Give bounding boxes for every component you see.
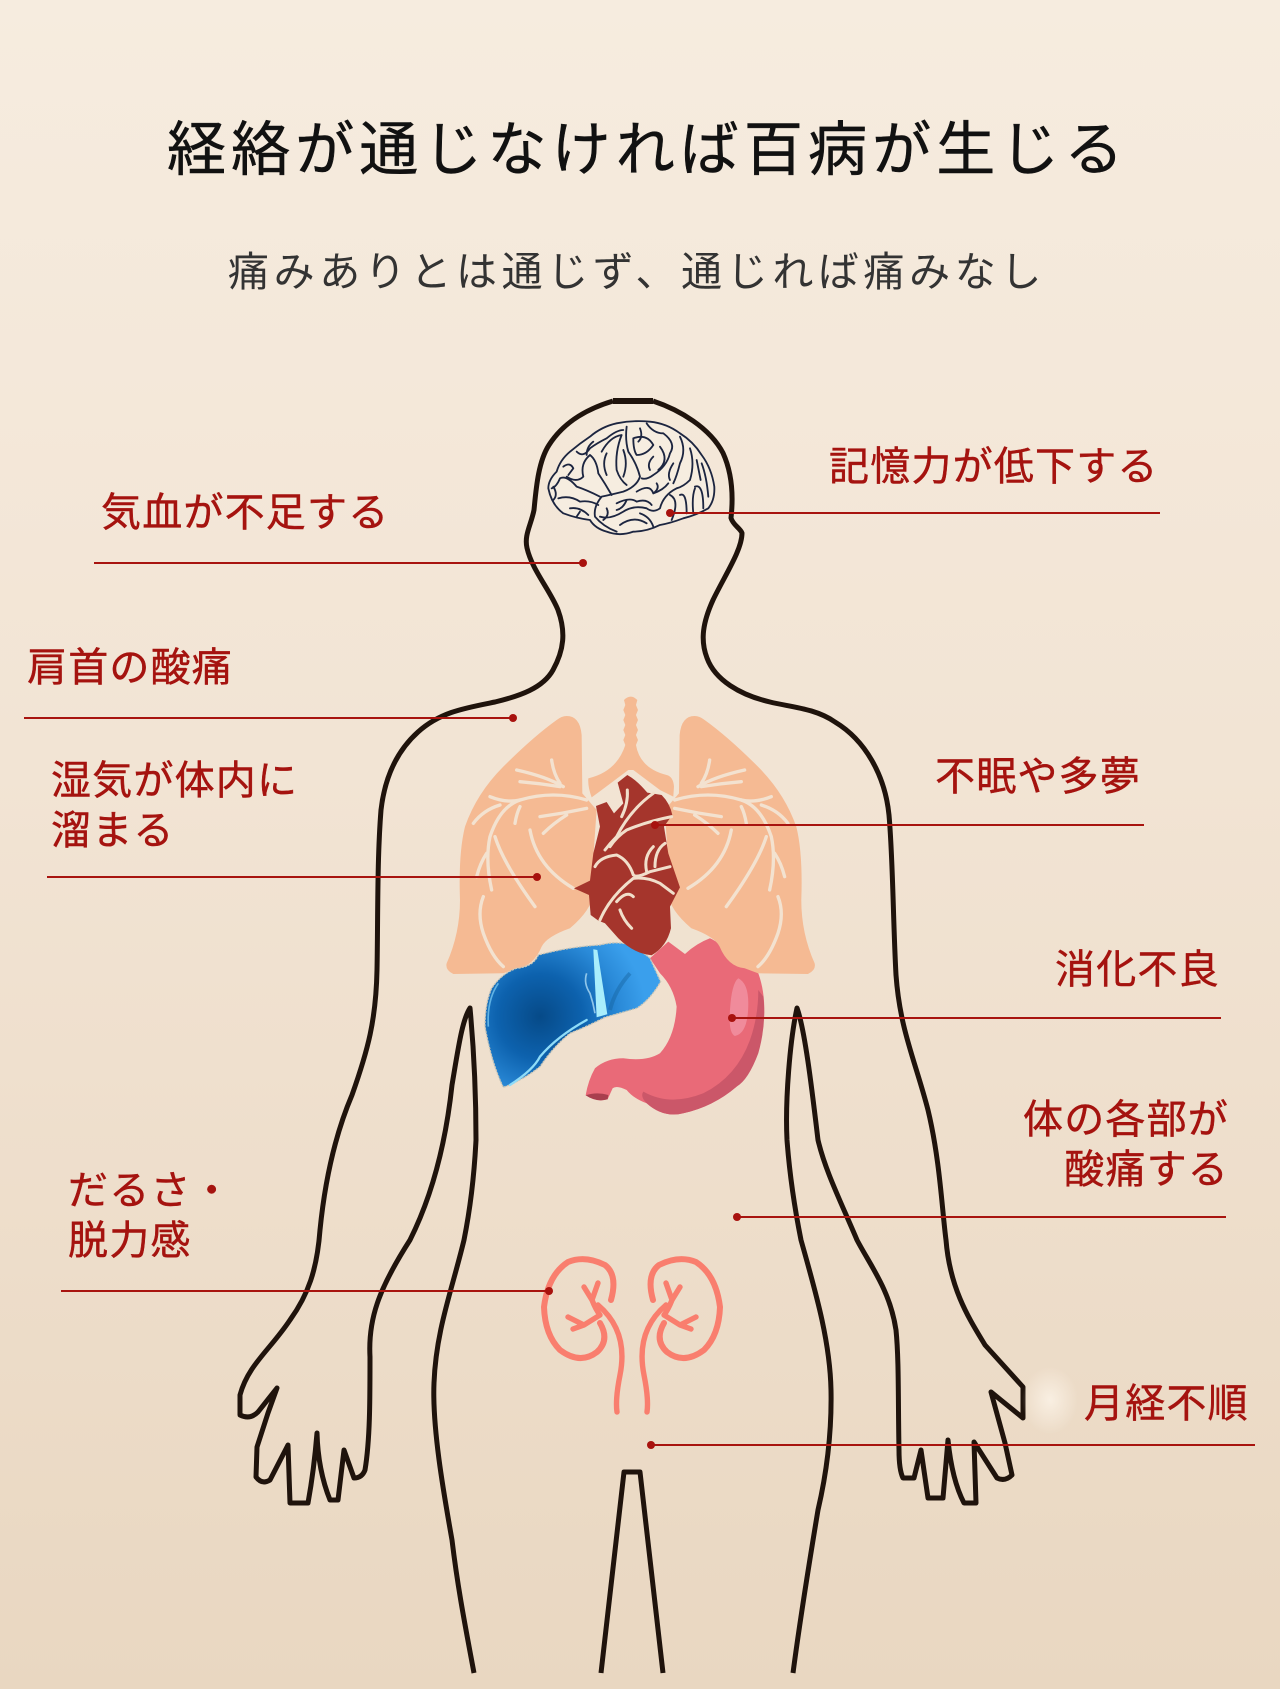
callout: 体の各部が酸痛する: 酸痛する [1064, 1148, 1229, 1192]
callout: だるさ・脱力感: 脱力感 [68, 1219, 192, 1263]
callout: 月経不順 [647, 1382, 1255, 1449]
callout: 湿気が体内に溜まる [47, 759, 541, 881]
icon: kidneys [544, 1259, 720, 1412]
callout: 湿気が体内に溜まる: 湿気が体内に [51, 759, 298, 803]
icon: brain [548, 421, 714, 534]
callout: 月経不順: 月経不順 [1084, 1382, 1249, 1426]
icon: lungs and trachea [446, 697, 815, 974]
subtitle: 痛みありとは通じず、通じれば痛みなし [228, 249, 1046, 295]
callout: 消化不良: 消化不良 [1055, 948, 1220, 992]
callout: だるさ・脱力感: だるさ・ [68, 1169, 233, 1213]
human body outline [240, 401, 1023, 1673]
callout: 気血が不足する [94, 491, 587, 567]
pale glow behind label [1022, 1366, 1078, 1434]
icon: heart [574, 775, 680, 955]
callout: 湿気が体内に溜まる: 溜まる [51, 809, 175, 853]
callout: 肩首の酸痛 [24, 646, 517, 722]
lung pair [446, 716, 597, 974]
callout: 記憶力が低下する: 記憶力が低下する [829, 445, 1159, 489]
callout: 肩首の酸痛: 肩首の酸痛 [27, 646, 233, 690]
icon: stomach [586, 938, 764, 1115]
callout: 記憶力が低下する [666, 445, 1160, 517]
callout: 不眠や多夢: 不眠や多夢 [935, 755, 1141, 799]
title: 経絡が通じなければ百病が生じる [167, 117, 1129, 183]
trachea [588, 697, 674, 797]
callout: 消化不良 [728, 948, 1221, 1022]
callout: 体の各部が酸痛する: 体の各部が [1023, 1098, 1229, 1142]
callout: 体の各部が酸痛する [733, 1098, 1229, 1221]
callout: だるさ・脱力感 [61, 1169, 553, 1295]
icon: liver [485, 943, 661, 1087]
callout: 不眠や多夢 [651, 755, 1144, 829]
callout: 気血が不足する: 気血が不足する [101, 491, 389, 535]
